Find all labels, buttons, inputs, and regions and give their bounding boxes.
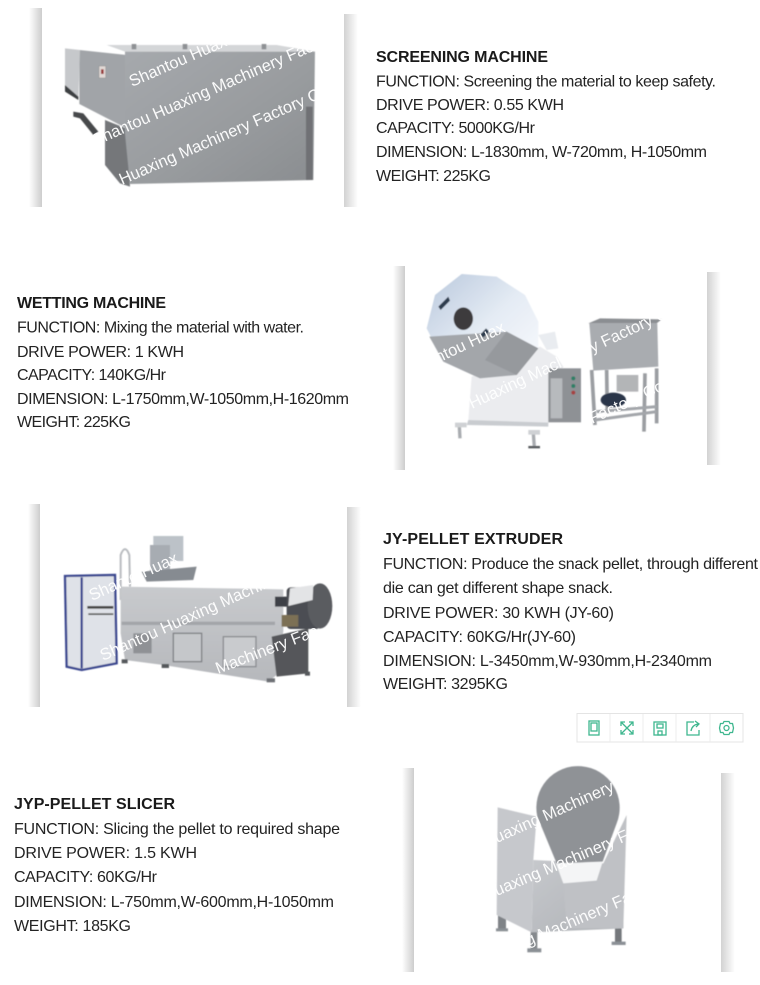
watermark text: g Machinery Fa: [523, 888, 635, 950]
illustration: screening machine: [65, 44, 315, 187]
watermark text: Shantou Huaxing: [126, 24, 250, 91]
illustration: pellet slicer: [496, 766, 627, 952]
text block: wetting machine specs: WETTING MACHINE: [17, 295, 166, 312]
watermark text: ntou Huax: [432, 318, 509, 367]
panel: pellet extruder photo: [28, 504, 361, 707]
icon: settings gear: [720, 722, 734, 734]
text block: wetting machine specs: [17, 295, 349, 431]
text block: pellet slicer specs: [14, 796, 340, 935]
text block: pellet extruder specs: DRIVE POWER: 30 KWH (JY-60): [383, 605, 614, 622]
text block: pellet slicer specs: DRIVE POWER: 1.5 KWH: [14, 845, 197, 862]
watermark text: Factory Co: [586, 377, 667, 428]
text block: pellet extruder specs: WEIGHT: 3295KG: [383, 676, 508, 693]
text block: screening machine specs: SCREENING MACHINE: [376, 49, 548, 66]
text block: pellet slicer specs: CAPACITY: 60KG/Hr: [14, 869, 158, 886]
text block: pellet extruder specs: JY-PELLET EXTRUDER: [383, 531, 563, 548]
text block: wetting machine specs: DRIVE POWER: 1 KWH: [17, 344, 184, 361]
watermark text: Machinery Fac: [213, 622, 320, 678]
watermark text: Shantou Huaxing Machin: [97, 573, 273, 665]
text block: wetting machine specs: CAPACITY: 140KG/Hr: [17, 367, 167, 384]
text block: pellet extruder specs: die can get different shape snack.: [383, 580, 613, 597]
text block: screening machine specs: DRIVE POWER: 0.55 KWH: [376, 97, 564, 114]
text block: pellet slicer specs: JYP-PELLET SLICER: [14, 796, 175, 813]
watermark text: [93, 44, 315, 184]
panel: screening machine photo: [29, 8, 358, 207]
watermark text: Shanto Huax: [86, 549, 181, 605]
watermark text: Shantou Huaxing Machinery Factory: [89, 26, 342, 150]
text block: pellet slicer specs: WEIGHT: 185KG: [14, 918, 131, 935]
text block: screening machine specs: DIMENSION: L-1830mm, W-720mm, H-1050mm: [376, 144, 707, 161]
text block: screening machine specs: WEIGHT: 225KG: [376, 168, 491, 185]
icon: share: [687, 721, 699, 735]
watermark text: [496, 782, 626, 948]
icon: save disk: [654, 722, 666, 735]
icon: expand arrows: [621, 722, 633, 734]
watermark text: Huaxing Machinery Factory Co: [116, 82, 331, 189]
icon: tablet: [589, 721, 599, 735]
watermark text: Huaxing Machinery Factory Co: [466, 301, 679, 413]
illustration: wetting machine: [427, 274, 662, 448]
text block: pellet extruder specs: DIMENSION: L-3450mm,W-930mm,H-2340mm: [383, 653, 712, 670]
text block: wetting machine specs: DIMENSION: L-1750mm,W-1050mm,H-1620mm: [17, 391, 349, 408]
text block: pellet slicer specs: DIMENSION: L-750mm,W-600mm,H-1050mm: [14, 894, 334, 911]
text block: pellet extruder specs: CAPACITY: 60KG/Hr(JY-60): [383, 629, 576, 646]
text block: screening machine specs: [376, 49, 716, 185]
text block: pellet extruder specs: [383, 531, 759, 693]
illustration: pellet extruder: [65, 536, 332, 682]
text block: wetting machine specs: WEIGHT: 225KG: [17, 414, 131, 431]
watermark text: [438, 318, 662, 424]
toolbar: action icons: [577, 714, 743, 742]
watermark text: uaxing Machinery: [491, 777, 617, 847]
watermark text: [90, 554, 316, 674]
text block: pellet extruder specs: FUNCTION: Produce the snack pellet, through different: [383, 556, 759, 573]
text block: screening machine specs: FUNCTION: Screening the material to keep safety.: [376, 74, 716, 90]
text block: pellet slicer specs: FUNCTION: Slicing the pellet to required shape: [14, 821, 340, 838]
watermark text: uaxing Machinery Fa: [492, 823, 640, 900]
text block: wetting machine specs: FUNCTION: Mixing the material with water.: [17, 320, 304, 336]
panel: wetting machine photo: [393, 266, 721, 470]
panel: pellet slicer photo: [402, 766, 735, 972]
text block: screening machine specs: CAPACITY: 5000KG/Hr: [376, 120, 536, 137]
